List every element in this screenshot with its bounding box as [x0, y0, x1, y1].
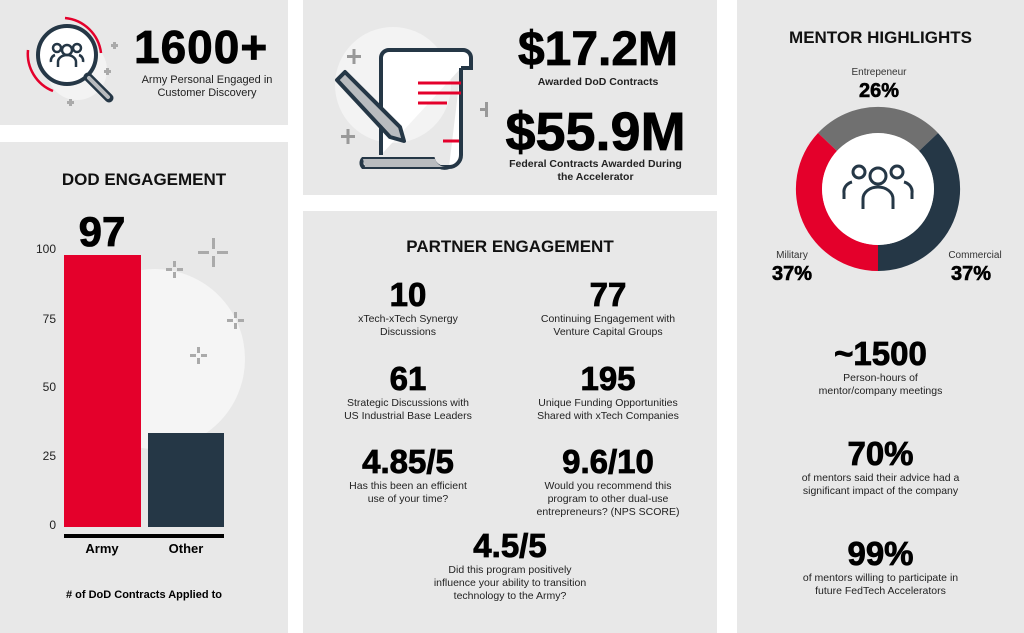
- stat 195: [537, 360, 679, 422]
- bar chart: 25: [43, 449, 56, 463]
- bar chart: 0: [49, 518, 56, 532]
- stat 9.6/10: 9.6/10: [562, 443, 654, 480]
- stat 99%: future FedTech Accelerators: [815, 585, 946, 597]
- heading: DOD ENGAGEMENT: [62, 170, 226, 189]
- stat 70%: significant impact of the company: [803, 485, 958, 497]
- stat 4.5/5: influence your ability to transition: [434, 577, 586, 589]
- panel: contracts: the Accelerator: [557, 171, 634, 183]
- panel: contracts: [303, 0, 717, 195]
- stat 4.85/5: Has this been an efficient: [349, 480, 467, 492]
- stat 4.85/5: 4.85/5: [362, 443, 454, 480]
- stat 9.6/10: [536, 443, 679, 518]
- stat 10: 10: [390, 276, 426, 313]
- stat 9.6/10: program to other dual-use: [548, 493, 668, 505]
- donut chart: [772, 67, 1002, 285]
- stat 4.5/5: technology to the Army?: [454, 590, 566, 602]
- bar chart: 100: [36, 242, 56, 256]
- bar chart: # of DoD Contracts Applied to: [66, 589, 222, 601]
- heading: PARTNER ENGAGEMENT: [406, 237, 614, 256]
- donut chart: 37%: [772, 263, 812, 285]
- stat 99%: of mentors willing to participate in: [803, 572, 958, 584]
- bar chart: Army: [85, 541, 119, 556]
- stat 9.6/10: Would you recommend this: [544, 480, 672, 492]
- stat 4.5/5: Did this program positively: [448, 564, 572, 576]
- stat 99%: [803, 535, 958, 597]
- donut chart: Entrepeneur: [851, 67, 907, 78]
- stat $17.2M: $17.2M: [518, 23, 678, 76]
- panel: contracts: Federal Contracts Awarded During: [509, 158, 682, 170]
- caption: [142, 74, 272, 99]
- stat $55.9M: $55.9M: [505, 102, 686, 162]
- donut chart: 26%: [859, 80, 899, 102]
- panel: partner engagement: [303, 211, 717, 633]
- stat 4.5/5: 4.5/5: [473, 527, 547, 564]
- stat 4.85/5: [349, 443, 467, 505]
- stat 195: Shared with xTech Companies: [537, 410, 679, 422]
- donut chart: Military: [776, 250, 808, 261]
- bar chart: 75: [43, 312, 56, 326]
- stat ~1500: ~1500: [834, 335, 927, 372]
- caption: Customer Discovery: [157, 87, 257, 99]
- panel: DOD engagement: [0, 142, 288, 633]
- stat ~1500: mentor/company meetings: [819, 385, 942, 397]
- stat 61: [344, 360, 472, 422]
- bar chart: 97: [79, 208, 125, 255]
- stat 70%: [802, 435, 960, 497]
- stat 10: xTech-xTech Synergy: [358, 313, 458, 325]
- stat 4.85/5: use of your time?: [368, 493, 448, 505]
- stat 195: Unique Funding Opportunities: [538, 397, 678, 409]
- stat 61: Strategic Discussions with: [347, 397, 469, 409]
- stat 77: 77: [590, 276, 626, 313]
- bar chart: 50: [43, 380, 56, 394]
- stat 77: Continuing Engagement with: [541, 313, 675, 325]
- donut chart: Commercial: [948, 250, 1002, 261]
- stat 10: [358, 276, 458, 338]
- icon: magnifier with people: [26, 16, 118, 106]
- stat 1600+: 1600+: [134, 21, 268, 73]
- panel: mentor highlights: [737, 0, 1024, 633]
- heading: MENTOR HIGHLIGHTS: [789, 28, 972, 47]
- stat 77: Venture Capital Groups: [553, 326, 663, 338]
- stat 4.5/5: [434, 527, 586, 602]
- icon: scroll with pen: [334, 27, 488, 170]
- stat 195: 195: [580, 360, 636, 397]
- stat 61: US Industrial Base Leaders: [344, 410, 472, 422]
- panel: contracts: Awarded DoD Contracts: [538, 76, 658, 88]
- stat ~1500: Person-hours of: [843, 372, 918, 384]
- stat 77: [541, 276, 675, 338]
- caption: Army Personal Engaged in: [142, 74, 272, 86]
- stat 9.6/10: entrepreneurs? (NPS SCORE): [536, 506, 679, 518]
- stat 70%: 70%: [847, 435, 914, 472]
- stat ~1500: [819, 335, 942, 397]
- stat 61: 61: [390, 360, 426, 397]
- panel: army personnel: [0, 0, 288, 125]
- bar chart: Other: [169, 541, 203, 556]
- stat 70%: of mentors said their advice had a: [802, 472, 959, 484]
- donut chart: 37%: [951, 263, 991, 285]
- stat 99%: 99%: [847, 535, 914, 572]
- stat 10: Discussions: [380, 326, 436, 338]
- bar chart: [36, 208, 245, 601]
